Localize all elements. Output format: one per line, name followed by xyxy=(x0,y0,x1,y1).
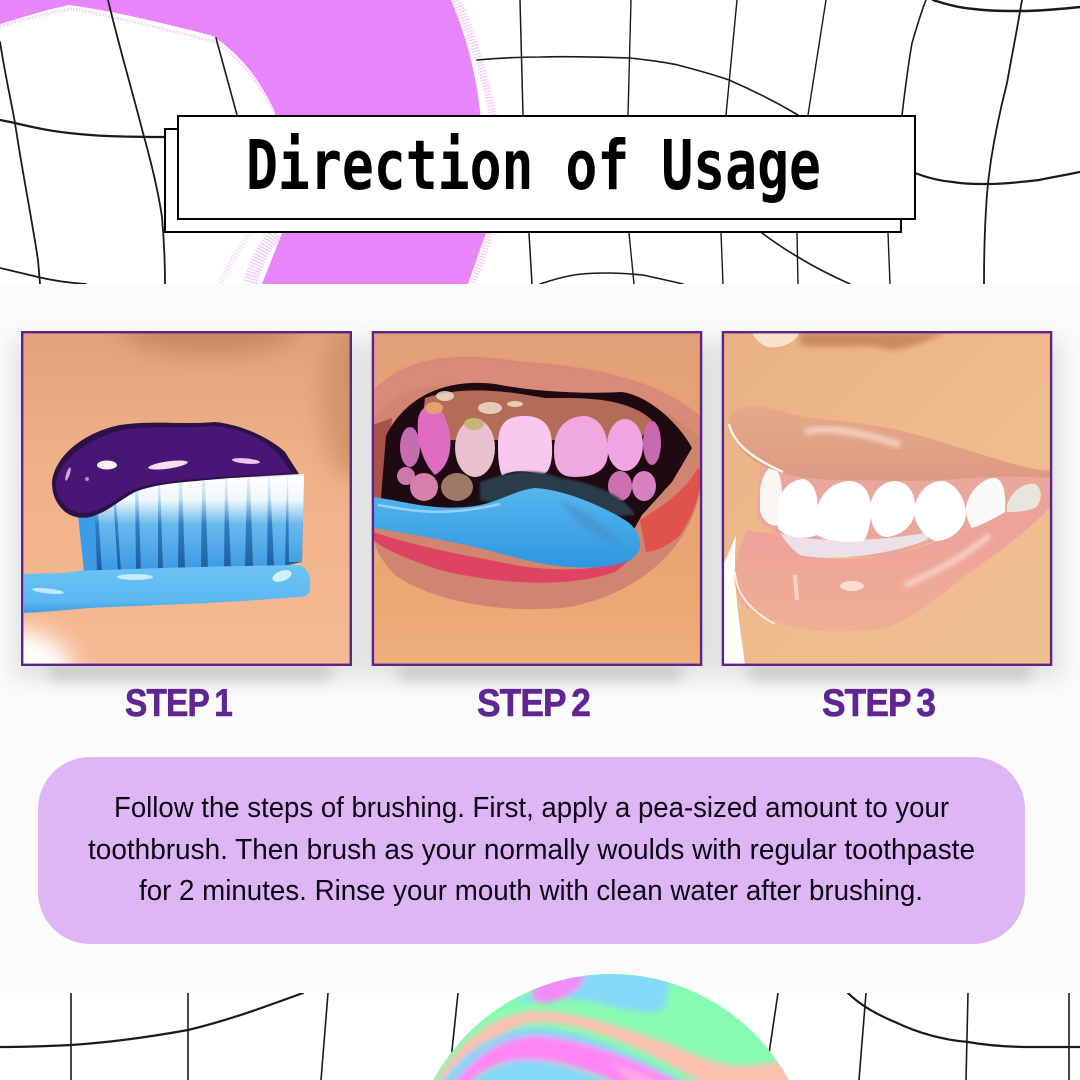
step 2 panel xyxy=(365,332,711,725)
step 2 shadow xyxy=(365,340,711,680)
step 3 label: STEP 3 xyxy=(822,682,935,725)
step 3 panel xyxy=(715,332,1061,725)
lower teeth xyxy=(780,532,930,558)
footer warped grid lines xyxy=(0,993,1080,1080)
dark mouth interior xyxy=(381,382,692,528)
step 3 shadow xyxy=(715,340,1061,680)
step 1 frame xyxy=(22,332,351,665)
step 3 frame xyxy=(723,332,1051,665)
warped grid lines xyxy=(0,0,1080,284)
instruction line 3: for 2 minutes. Rinse your mouth with clean water after brushing. xyxy=(139,875,923,907)
stained teeth xyxy=(397,402,661,501)
callout background xyxy=(38,757,1025,944)
step 2 frame xyxy=(373,332,701,665)
step 1 label: STEP 1 xyxy=(125,682,232,725)
instructions callout xyxy=(38,757,1025,944)
lips xyxy=(373,357,702,609)
instruction line 2: toothbrush. Then brush as your normally woulds with regular toothpaste xyxy=(88,834,975,866)
step 1 photo: toothbrush with purple paste xyxy=(23,333,350,664)
step 2 label: STEP 2 xyxy=(477,682,590,725)
step 2 photo: brushing stained teeth xyxy=(373,332,702,665)
toothbrush handle xyxy=(24,565,310,613)
back offset box xyxy=(165,129,901,232)
title banner xyxy=(165,116,915,232)
holographic sphere xyxy=(433,974,789,1080)
footer panel background xyxy=(0,993,1080,1080)
upper lip xyxy=(728,406,1052,481)
purple brush shape xyxy=(0,0,494,284)
title text: Direction of Usage xyxy=(246,126,821,206)
step 3 photo: white smile xyxy=(723,332,1052,665)
gums xyxy=(420,390,652,440)
mouth interior xyxy=(757,465,1052,557)
front box xyxy=(178,116,915,219)
bristles xyxy=(78,474,304,572)
purple toothpaste xyxy=(52,422,299,518)
step 1 panel xyxy=(8,331,366,717)
instruction line 1: Follow the steps of brushing. First, apply a pea-sized amount to your xyxy=(114,792,949,824)
step 1 shadow xyxy=(14,340,360,680)
upper teeth xyxy=(760,466,1041,542)
blue toothbrush head xyxy=(373,488,640,568)
middle band background xyxy=(0,284,1080,993)
lower lip xyxy=(734,490,1052,631)
dark bristles xyxy=(480,472,635,520)
header backdrop: purple brush ring and warped grid xyxy=(0,0,1080,284)
